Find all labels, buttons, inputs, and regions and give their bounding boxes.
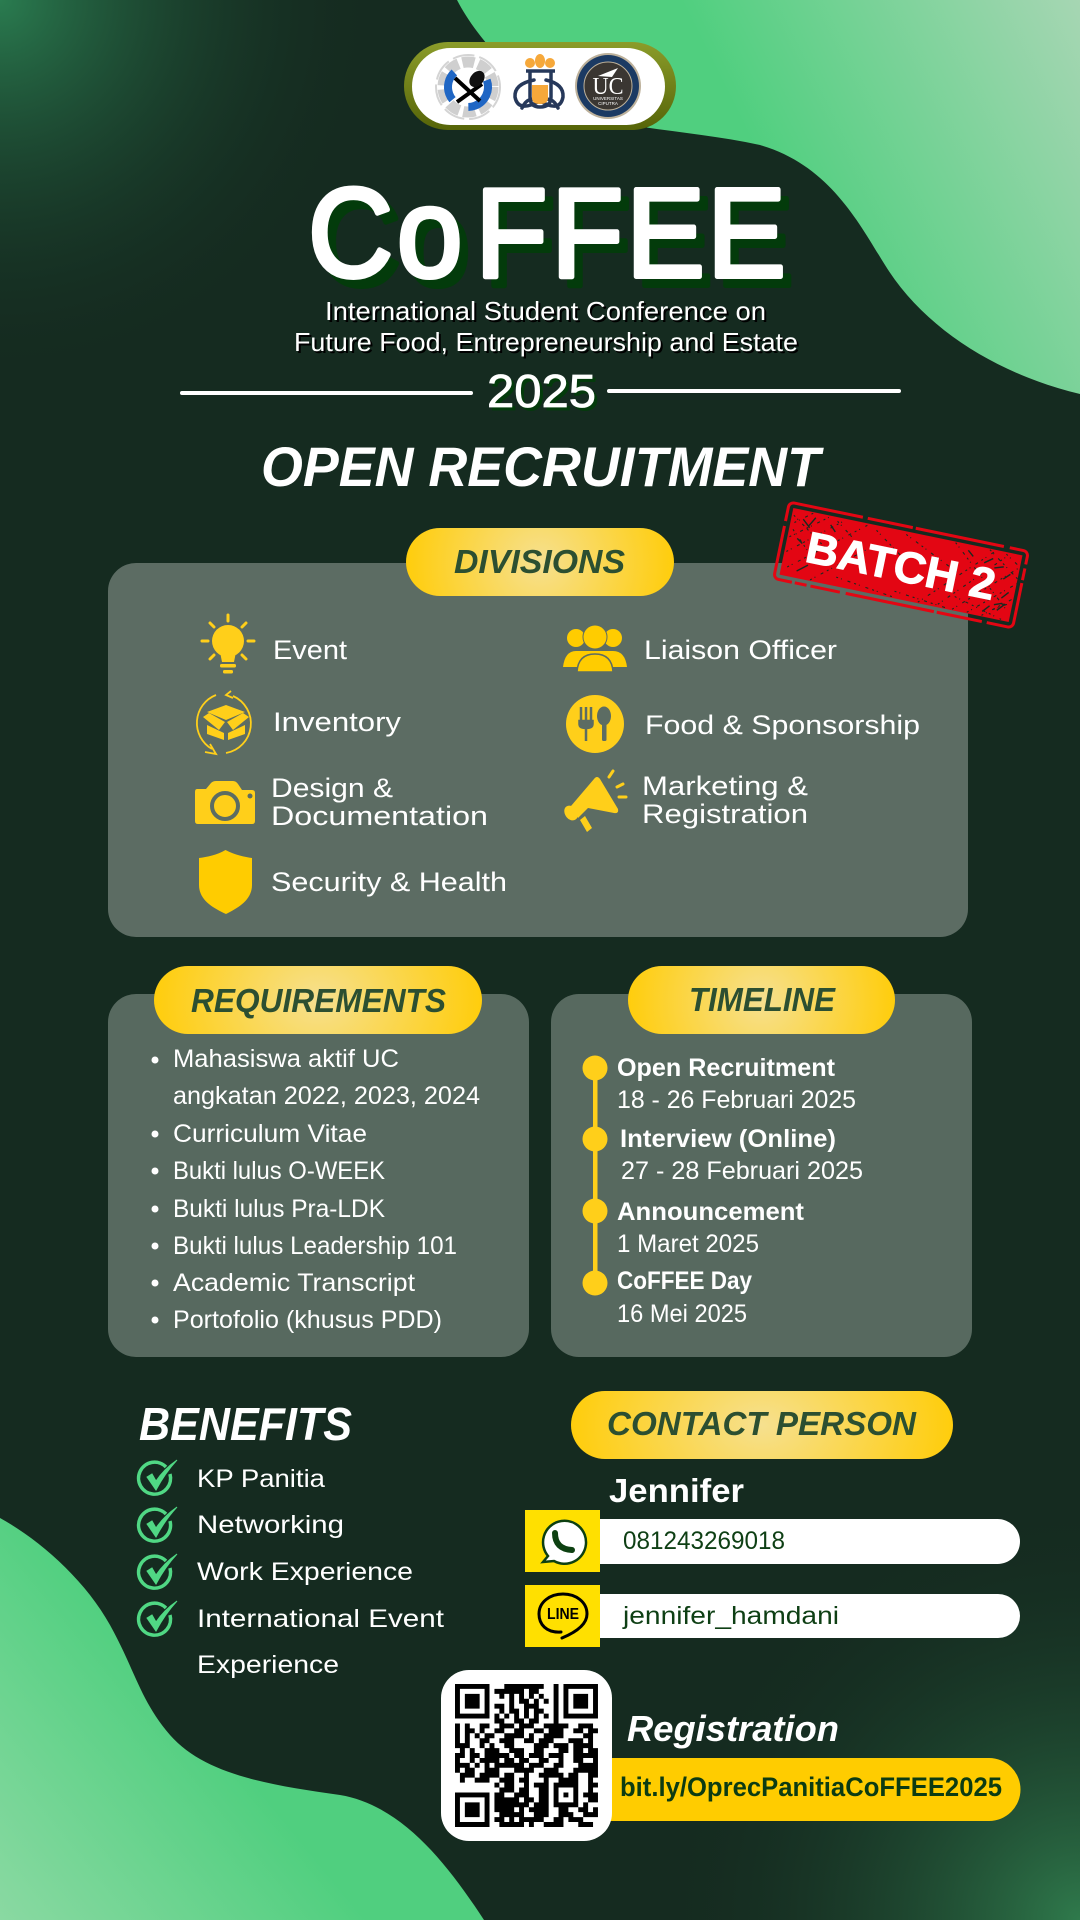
icon: light bulb [202, 615, 254, 674]
division: marketing and registration: Registration [642, 799, 808, 829]
year with rules: 2025 [487, 365, 596, 417]
benefits list: KP Panitia [197, 1465, 325, 1493]
registration heading: Registration [627, 1708, 839, 1749]
divisions label [406, 528, 674, 596]
requirements label: REQUIREMENTS [191, 982, 446, 1019]
timeline: interview: Interview (Online) [620, 1125, 836, 1153]
requirements list: Mahasiswa aktif UC [173, 1045, 399, 1073]
timeline track with dots [582, 1056, 608, 1296]
timeline label: TIMELINE [689, 981, 836, 1018]
division: event: Event [273, 635, 348, 665]
divisions label: DIVISIONS [454, 543, 625, 580]
subtitle [294, 296, 798, 357]
timeline: announcement: 1 Maret 2025 [617, 1230, 759, 1258]
stamp: batch 2: BATCH 2 [802, 523, 1000, 610]
benefits list: Work Experience [197, 1558, 413, 1586]
panel: divisions [108, 528, 968, 937]
logo pill [404, 42, 676, 130]
timeline: coffee day: CoFFEE Day [617, 1267, 752, 1295]
logo: Universitas Ciputra seal [575, 53, 641, 119]
timeline: interview: 27 - 28 Februari 2025 [621, 1157, 863, 1185]
qr code [441, 1670, 612, 1841]
heading: open recruitment: OPEN RECRUITMENT [261, 435, 825, 498]
panel: requirements [108, 966, 529, 1357]
icon: megaphone [561, 771, 626, 832]
icon: whatsapp [543, 1521, 586, 1564]
logo: food technology gear [436, 55, 500, 119]
timeline label [628, 966, 895, 1034]
logo: science flask [515, 54, 563, 108]
division: design and documentation: Documentation [271, 801, 488, 831]
division: marketing and registration [642, 771, 808, 829]
panel: timeline [551, 966, 972, 1357]
icon: inventory box [197, 691, 251, 754]
contact name: Jennifer [609, 1472, 744, 1509]
timeline: open recruitment: Open Recruitment [617, 1054, 836, 1082]
timeline: announcement [617, 1198, 805, 1258]
icon: shield [199, 850, 252, 914]
stamp: batch 2 [774, 502, 1028, 628]
timeline: coffee day: 16 Mei 2025 [617, 1300, 747, 1328]
title: CoFFEE [308, 163, 786, 303]
requirements list: Bukti lulus Pra-LDK [173, 1195, 385, 1223]
timeline: open recruitment [617, 1054, 856, 1114]
requirements list: Bukti lulus O-WEEK [173, 1157, 385, 1185]
requirements bullets [152, 1056, 158, 1324]
contact person label: CONTACT PERSON [607, 1405, 917, 1442]
line contact [525, 1585, 1020, 1647]
registration link pill [600, 1758, 1021, 1821]
icon: people [563, 625, 627, 672]
requirements list [173, 1045, 480, 1334]
timeline: announcement: Announcement [617, 1198, 805, 1226]
division: security and health: Security & Health [271, 867, 507, 897]
division: marketing and registration: Marketing & [642, 771, 808, 801]
registration link pill: bit.ly/OprecPanitiaCoFFEE2025 [620, 1772, 1002, 1802]
logo: Universitas Ciputra seal: CIPUTRA [598, 101, 618, 106]
icon: line: LINE [547, 1606, 579, 1623]
requirements list: Curriculum Vitae [173, 1120, 367, 1148]
logo: Universitas Ciputra seal: UNIVERSITAS [593, 96, 623, 101]
icon: line [539, 1594, 587, 1638]
requirements list: Academic Transcript [173, 1269, 415, 1297]
icon: food circle [566, 695, 624, 753]
requirements label [154, 966, 482, 1034]
benefits list: International Event [197, 1605, 444, 1633]
heading: benefits: BENEFITS [139, 1398, 352, 1450]
whatsapp contact: 081243269018 [623, 1527, 785, 1555]
icon: camera [195, 781, 255, 824]
division: liaison officer: Liaison Officer [644, 635, 837, 665]
division: food and sponsorship: Food & Sponsorship [645, 710, 920, 740]
benefit check icons [139, 1460, 177, 1635]
division: inventory: Inventory [273, 707, 402, 737]
benefits list [197, 1465, 444, 1679]
subtitle: International Student Conference on [325, 296, 766, 326]
timeline: open recruitment: 18 - 26 Februari 2025 [617, 1086, 856, 1114]
division: design and documentation [271, 773, 488, 831]
subtitle: Future Food, Entrepreneurship and Estate [294, 327, 798, 357]
contact person label [571, 1391, 953, 1459]
requirements list: angkatan 2022, 2023, 2024 [173, 1082, 480, 1110]
division: design and documentation: Design & [271, 773, 393, 803]
benefits list: Experience [197, 1651, 339, 1679]
benefits list: Networking [197, 1511, 344, 1539]
requirements list: Bukti lulus Leadership 101 [173, 1232, 457, 1260]
timeline: coffee day [617, 1267, 752, 1328]
requirements list: Portofolio (khusus PDD) [173, 1306, 442, 1334]
logo: Universitas Ciputra seal: UC [592, 74, 624, 100]
whatsapp contact [525, 1510, 1020, 1572]
line contact: jennifer_hamdani [622, 1602, 839, 1630]
timeline: interview [620, 1125, 863, 1185]
